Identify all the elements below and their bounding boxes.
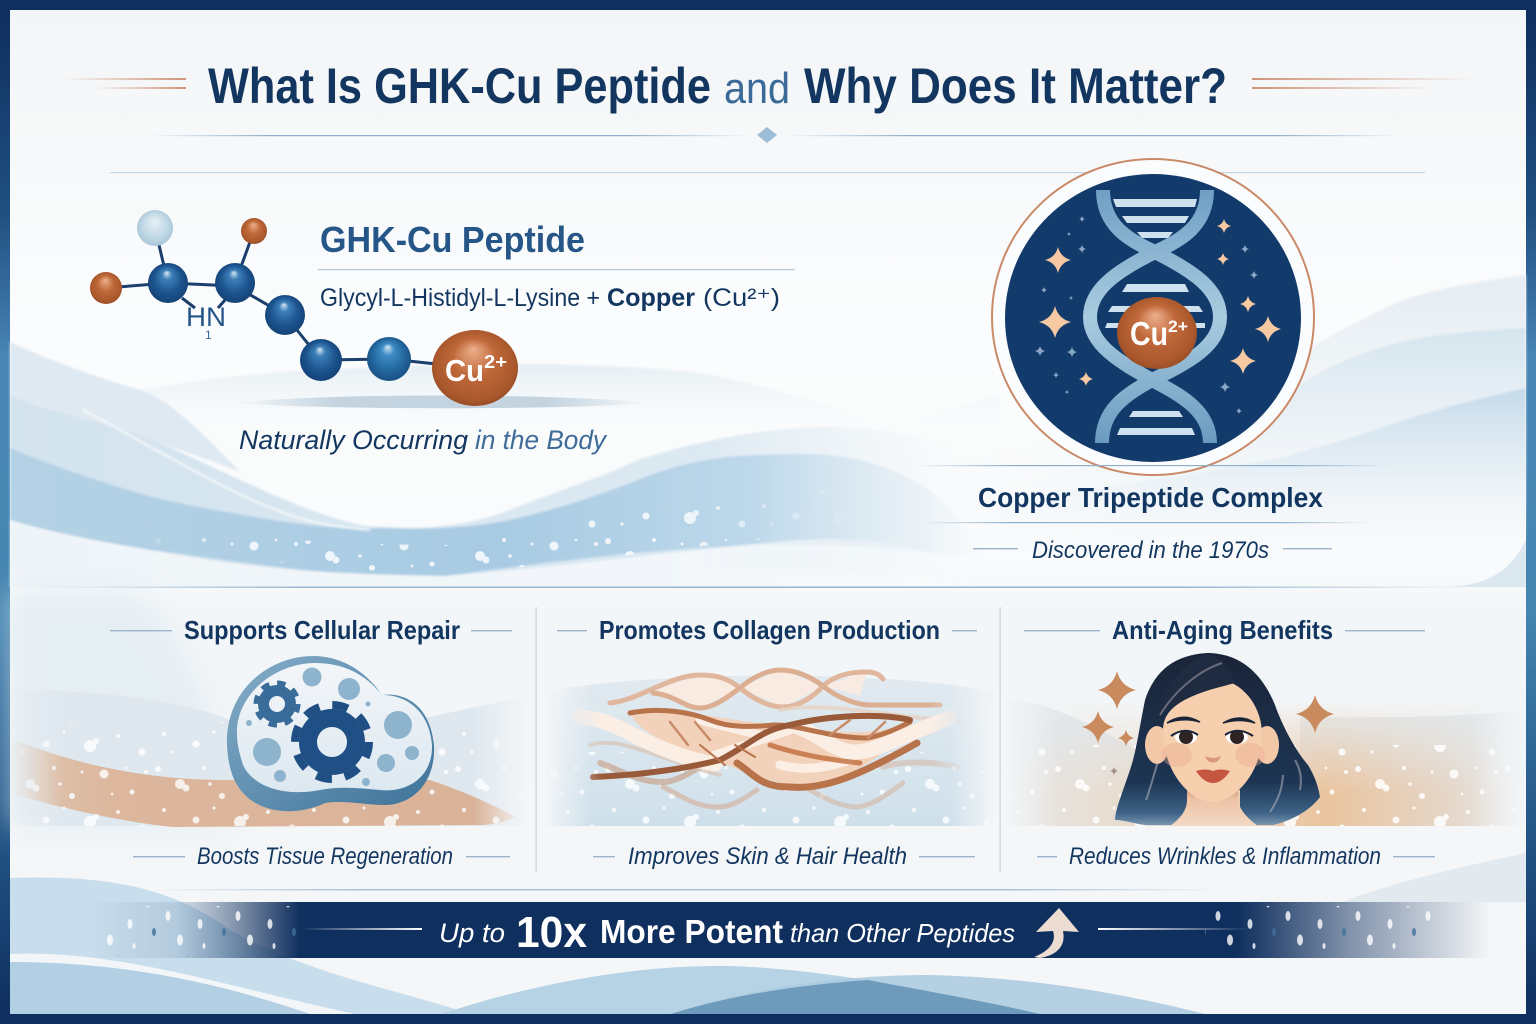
title: What Is GHK-Cu Peptide [208, 58, 711, 114]
column 3 hills [1024, 702, 1504, 826]
title [208, 58, 1227, 114]
background waves: bottom [10, 853, 1526, 1014]
icon: cell with gears [227, 656, 434, 811]
strands [1090, 190, 1220, 443]
sparkles [1082, 671, 1334, 775]
banner text [439, 908, 1015, 957]
lips [1196, 770, 1230, 783]
divider between panels [30, 586, 1470, 588]
shadow under molecule [235, 396, 650, 408]
ears [1145, 726, 1169, 764]
copper ion [432, 330, 518, 406]
face shape [1163, 683, 1262, 802]
sparkles [1039, 219, 1281, 386]
banner text: than Other Peptides [790, 918, 1015, 948]
banner text: More Potent [600, 913, 783, 950]
column 3: anti-aging [1024, 615, 1435, 870]
heading: Supports Cellular Repair [184, 615, 460, 645]
column 2: collagen production [557, 615, 977, 870]
caption: naturally occurring: Naturally Occurring [239, 425, 468, 455]
copper tripeptide caption: Copper Tripeptide Complex [978, 482, 1323, 513]
caption: naturally occurring [239, 425, 607, 455]
GHK-Cu heading and formula: Copper [607, 284, 695, 312]
bottom banner [90, 902, 1490, 958]
rungs [1105, 199, 1205, 435]
copper ion: Cu [445, 353, 484, 388]
copper ion in DNA [1117, 297, 1197, 369]
upper fibres [656, 672, 866, 706]
copper ion in DNA: Cu [1130, 315, 1168, 352]
background waves: lower panels [10, 590, 1526, 827]
fringe [1155, 653, 1235, 720]
copper fibres [630, 710, 910, 738]
title: Why Does It Matter? [804, 58, 1227, 114]
copper tripeptide caption: Discovered in the 1970s [1032, 537, 1269, 564]
title divider [110, 127, 1425, 173]
copper tripeptide caption [915, 465, 1390, 564]
brows [1167, 717, 1200, 723]
DNA medallion [992, 159, 1314, 475]
column 2 hill [545, 675, 995, 826]
hair highlights [1146, 755, 1301, 812]
caption: Boosts Tissue Regeneration [197, 843, 453, 870]
banner text: Up to [439, 918, 505, 948]
GHK-Cu heading and formula: (Cu²⁺) [703, 284, 780, 312]
HN label: 1 [205, 328, 212, 342]
top line decoration [65, 78, 1475, 89]
arrow [1034, 908, 1079, 958]
atoms [90, 210, 411, 381]
icon: collagen fibers [577, 670, 960, 807]
heading: Anti-Aging Benefits [1112, 615, 1333, 645]
column 1: cellular repair [110, 615, 512, 870]
column 1 hills [16, 701, 516, 827]
title: and [724, 64, 790, 113]
panel corner tint [1440, 540, 1526, 587]
heading: Promotes Collagen Production [599, 615, 940, 645]
caption: Improves Skin & Hair Health [628, 843, 907, 870]
peach fill between fibres [630, 711, 910, 787]
hair [1115, 653, 1320, 825]
background waves: upper right [1074, 274, 1528, 551]
dot texture [105, 906, 305, 956]
GHK-Cu heading and formula [318, 219, 795, 312]
cream ribbons [577, 717, 715, 764]
nose [1206, 757, 1220, 762]
eyes [1175, 730, 1197, 744]
column dividers [536, 607, 1001, 872]
GHK-Cu heading and formula: GHK-Cu Peptide [320, 219, 585, 260]
faint fibres [600, 763, 700, 782]
background waves: upper left [10, 342, 1010, 587]
caption: Reduces Wrinkles & Inflammation [1069, 843, 1381, 870]
copper ion in DNA: 2+ [1168, 317, 1188, 336]
HN label: HN [186, 302, 226, 332]
molecule [90, 210, 650, 408]
white dots over upper wave [155, 502, 816, 570]
icon: face [1082, 653, 1334, 826]
small stars [1035, 216, 1258, 414]
copper ion: 2+ [484, 352, 507, 372]
large gear [295, 705, 369, 779]
small gear [256, 683, 298, 725]
neck [1170, 785, 1258, 826]
caption: naturally occurring: in the Body [475, 425, 607, 455]
banner text: 10x [516, 908, 588, 957]
cheeks [1162, 743, 1192, 767]
GHK-Cu heading and formula: Glycyl-L-Histidyl-L-Lysine + [320, 284, 600, 312]
bonds [106, 228, 475, 368]
